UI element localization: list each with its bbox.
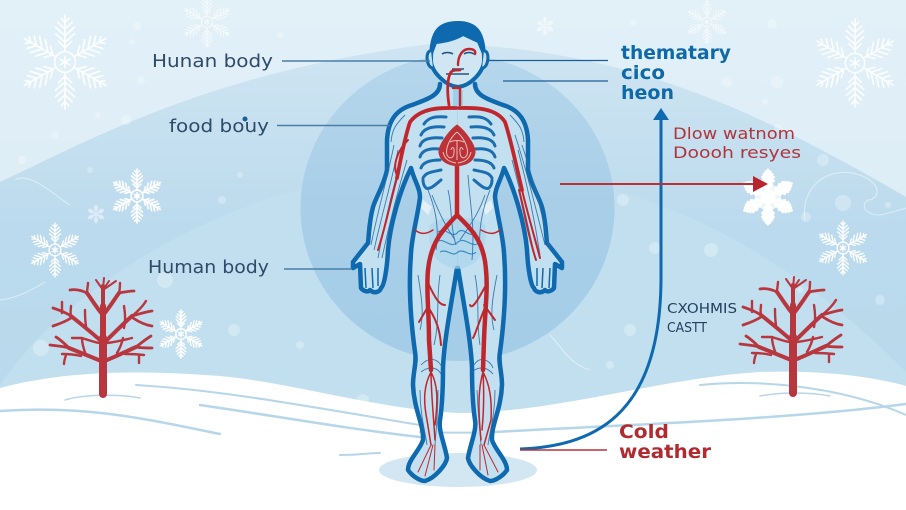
- text: red caption: [673, 124, 801, 162]
- hand finger gaps: [365, 268, 550, 288]
- text: small caption: CXOHMIS: [667, 302, 737, 317]
- heading: Cold weather: weather: [619, 441, 712, 463]
- heading: thematary cico heon: heon: [621, 82, 674, 104]
- snowflake: near left tree: [158, 310, 204, 358]
- snowflake: top right large: [812, 19, 898, 107]
- arteries: [378, 49, 540, 476]
- label: Human body: Human body: [148, 257, 269, 278]
- heading: thematary cico heon: [621, 42, 732, 104]
- label line: top right two: [503, 80, 608, 82]
- label line: top right one: [487, 60, 608, 62]
- heart: [439, 125, 475, 166]
- tree: right: [740, 277, 842, 393]
- label line: human body lower: [284, 268, 352, 270]
- snow drift lines: [0, 383, 906, 455]
- text: small caption: [667, 302, 737, 336]
- label: Hunan body: Hunan body: [152, 51, 273, 72]
- heading: Cold weather: Cold: [619, 421, 669, 443]
- ribs: [420, 117, 495, 188]
- veins detail: [371, 115, 550, 445]
- body outline: [353, 84, 562, 481]
- neck: [453, 90, 463, 110]
- heading: thematary cico heon: thematary: [621, 42, 732, 64]
- snowflake: top right small: [686, 0, 728, 44]
- arrow: blue upward curve: [520, 108, 669, 449]
- arrow: cold weather red line: [520, 449, 607, 451]
- snowflake: left upper: [111, 169, 163, 223]
- snowflake: small faint: [87, 205, 105, 223]
- label: food body: food bouy: [169, 116, 269, 137]
- central halo circle: [300, 55, 614, 361]
- heading: thematary cico heon: cico: [621, 62, 665, 84]
- snowflake: top centre left: [182, 0, 232, 48]
- background wisps: [0, 172, 906, 370]
- heading: Cold weather: [619, 421, 712, 463]
- human body figure: [353, 23, 562, 481]
- text: red caption: Doooh resyes: [673, 143, 801, 162]
- background hill back layer: [0, 44, 906, 420]
- arrow: red horizontal: [560, 176, 768, 192]
- background bokeh dots: [18, 19, 891, 406]
- snow ground: [0, 372, 906, 510]
- tree: left: [50, 278, 152, 394]
- snowflake: left lower: [29, 223, 81, 277]
- background hill front layer: [0, 168, 906, 420]
- body fill: [353, 80, 562, 481]
- snowflake: top left large: [20, 15, 110, 109]
- snowflake: arrow target: [742, 170, 794, 224]
- text: small caption: CASTT: [667, 321, 707, 336]
- head: [427, 23, 488, 87]
- snowflake: right lower: [817, 221, 869, 275]
- label line: food body: [277, 124, 390, 126]
- snowflake: tiny top centre: [536, 17, 554, 35]
- abdomen organs: [421, 200, 493, 269]
- text: red caption: Dlow watnom: [673, 124, 795, 143]
- label line: human body top left: [282, 60, 430, 62]
- ground shadow: [379, 453, 537, 487]
